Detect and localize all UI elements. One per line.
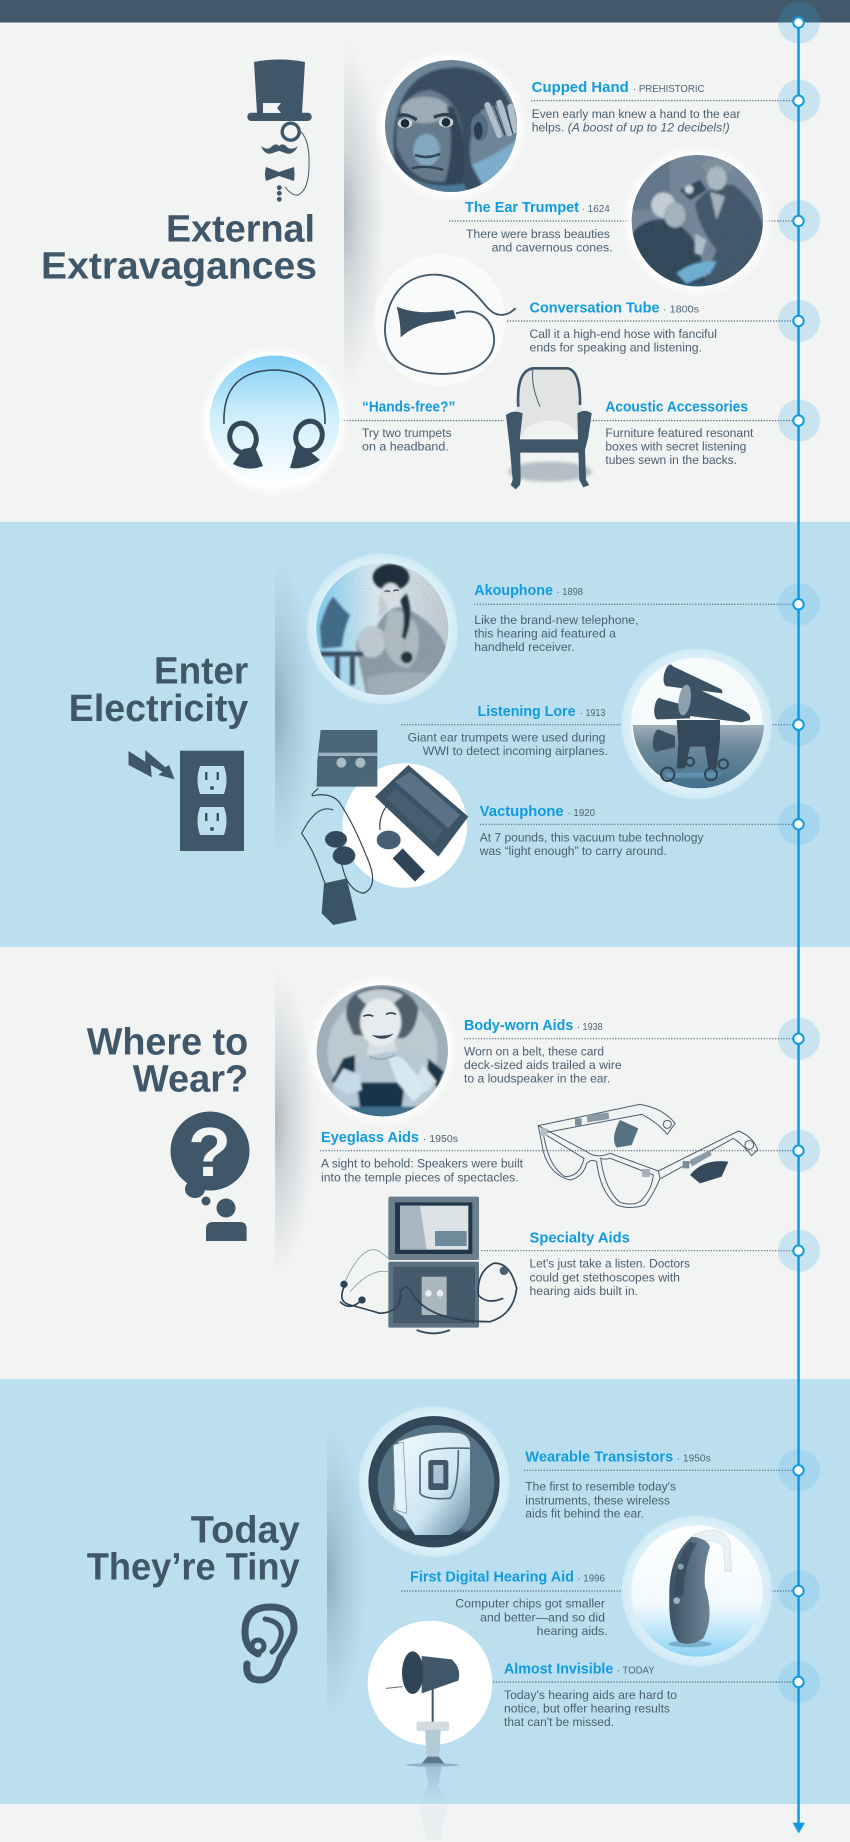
body text: handheld receiver. xyxy=(474,640,574,654)
title: Today They're Tiny: Today xyxy=(191,1509,300,1551)
body text xyxy=(605,426,754,467)
heading and date: · 1950s xyxy=(677,1454,711,1465)
body text xyxy=(455,1597,608,1638)
body text: Giant ear trumpets were used during xyxy=(408,730,606,744)
icon: wall outlet xyxy=(180,751,244,851)
item: Body-worn Aids xyxy=(306,975,793,1127)
item: Wearable Transistors xyxy=(358,1405,793,1558)
title: External Extravagances: External xyxy=(166,208,315,250)
photo: digital behind-the-ear hearing aid xyxy=(621,1515,773,1667)
photo: two trumpets on a headband xyxy=(198,345,350,497)
heading: “Hands-free?” xyxy=(362,400,455,416)
body text: Like the brand-new telephone, xyxy=(474,613,638,627)
heading and date: · 1920 xyxy=(568,808,595,819)
body text: Furniture featured resonant xyxy=(605,426,754,440)
body text: boxes with secret listening xyxy=(605,440,747,454)
body text: aids fit behind the ear. xyxy=(525,1507,644,1521)
body text: and cavernous cones. xyxy=(492,241,613,255)
photo: vactuphone kit with cases, earpieces and battery xyxy=(302,730,468,925)
body text: Even early man knew a hand to the ear xyxy=(532,107,740,121)
body text: A sight to behold: Speakers were built xyxy=(321,1157,524,1171)
photo: engraving of man speaking into ear trumpet xyxy=(622,152,772,290)
title: Enter Electricity: Enter xyxy=(154,650,248,692)
heading: Specialty Aids xyxy=(530,1230,630,1246)
body text xyxy=(362,426,452,454)
icon: ear xyxy=(245,1607,294,1680)
body text xyxy=(530,1257,690,1298)
bottom footer strip xyxy=(0,1804,850,1842)
heading and date: · 1913 xyxy=(580,708,606,719)
item: Almost Invisible xyxy=(368,1621,793,1840)
body text: to a loudspeaker in the ear. xyxy=(464,1072,610,1086)
photo: conversation tube xyxy=(374,254,516,386)
body text: deck-sized aids trailed a wire xyxy=(464,1058,622,1072)
title: Today They're Tiny xyxy=(87,1509,300,1588)
icon: thought bubble with question mark and person: ? xyxy=(188,1113,231,1191)
heading and date: Conversation Tube xyxy=(530,300,660,316)
photo: smiling woman holding body-worn aids xyxy=(314,982,452,1120)
body text: Computer chips got smaller xyxy=(455,1597,605,1611)
photo: wearable transistor aid xyxy=(358,1405,510,1558)
top bar xyxy=(0,0,850,22)
heading and date: · 1996 xyxy=(577,1574,605,1585)
body text: Try two trumpets xyxy=(362,426,452,440)
icon: gentleman with top hat, monocle, mustache and bow tie xyxy=(247,60,312,202)
body text: ends for speaking and listening. xyxy=(530,340,702,354)
body text: could get stethoscopes with xyxy=(530,1270,680,1284)
title: Enter Electricity: Electricity xyxy=(69,688,248,730)
body text: instruments, these wireless xyxy=(525,1493,670,1507)
body text xyxy=(474,613,638,654)
body text: Worn on a belt, these card xyxy=(464,1044,604,1058)
section background: Enter Electricity xyxy=(0,522,850,947)
body text xyxy=(466,227,613,255)
body text xyxy=(532,107,740,134)
body text: hearing aids. xyxy=(537,1624,608,1638)
item: First Digital Hearing Aid xyxy=(401,1515,793,1667)
body text: that can't be missed. xyxy=(504,1715,614,1729)
body text: tubes sewn in the backs. xyxy=(605,453,737,467)
illustration: eyeglasses with built-in hearing aids xyxy=(538,1104,758,1207)
heading and date: The Ear Trumpet xyxy=(465,200,579,216)
body text: on a headband. xyxy=(362,440,449,454)
body text xyxy=(530,327,717,354)
title: External Extravagances: Extravagances xyxy=(41,246,317,288)
heading and date: Vactuphone xyxy=(480,804,564,820)
item: Acoustic Accessories xyxy=(506,367,793,489)
photo: in-canal hearing aid on a stand with reflection xyxy=(368,1621,492,1840)
body text: Today's hearing aids are hard to xyxy=(504,1688,677,1702)
title: Enter Electricity xyxy=(69,650,248,730)
body text: The first to resemble today's xyxy=(525,1480,676,1494)
heading and date: Eyeglass Aids xyxy=(321,1130,419,1146)
photo: woman holding an akouphone receiver xyxy=(306,553,459,705)
section background: Where to Wear xyxy=(0,947,850,1379)
icon: thought bubble with question mark and person xyxy=(170,1112,250,1241)
item: Hands-free xyxy=(198,345,504,497)
item: Listening Lore xyxy=(401,648,793,800)
title: Where to Wear?: Where to xyxy=(87,1021,248,1063)
heading and date: · TODAY xyxy=(617,1665,655,1676)
item: Vactuphone xyxy=(302,730,793,925)
heading and date: Almost Invisible xyxy=(504,1661,613,1677)
item: Cupped Hand xyxy=(374,49,793,203)
body text: There were brass beauties xyxy=(466,227,610,241)
body text xyxy=(504,1688,677,1729)
body text: Let's just take a listen. Doctors xyxy=(530,1257,690,1271)
body text: was “light enough” to carry around. xyxy=(479,844,667,858)
body text xyxy=(525,1480,676,1521)
body text: this hearing aid featured a xyxy=(474,627,616,641)
body text: Call it a high-end hose with fanciful xyxy=(530,327,717,341)
section background: Today They're Tiny xyxy=(0,1379,850,1804)
heading and date: Akouphone xyxy=(474,583,553,599)
heading: Acoustic Accessories xyxy=(605,400,748,416)
item: Akouphone xyxy=(306,553,793,705)
title: Where to Wear?: Wear? xyxy=(133,1059,248,1101)
title: Today They're Tiny: They’re Tiny xyxy=(87,1546,300,1588)
heading and date: · 1624 xyxy=(582,204,610,215)
photo: armchair with hidden listening tubes xyxy=(506,367,592,489)
heading and date: Body-worn Aids xyxy=(464,1018,573,1034)
body text xyxy=(479,830,704,858)
title: External Extravagances xyxy=(41,208,317,288)
body text: At 7 pounds, this vacuum tube technology xyxy=(480,830,704,844)
item: Eyeglass Aids xyxy=(320,1104,793,1207)
icon: lightning bolt xyxy=(128,750,174,779)
timeline axis with arrow and nodes xyxy=(778,2,820,1834)
item: Conversation Tube xyxy=(374,254,793,386)
heading and date: · 1950s xyxy=(423,1134,458,1145)
heading and date: Listening Lore xyxy=(478,704,576,720)
body text xyxy=(408,730,608,758)
photo: man cupping hand to ear xyxy=(382,56,520,196)
item: The Ear Trumpet xyxy=(449,145,793,297)
heading and date: Cupped Hand xyxy=(532,80,629,96)
body text: and better—and so did xyxy=(480,1610,605,1624)
heading and date: Wearable Transistors xyxy=(525,1450,673,1466)
title: Where to Wear? xyxy=(87,1021,248,1101)
heading and date xyxy=(532,80,704,96)
body text xyxy=(464,1044,622,1086)
body text: hearing aids built in. xyxy=(530,1284,638,1298)
body text xyxy=(321,1157,524,1184)
heading and date: · 1898 xyxy=(557,587,583,598)
photo: stethoscope hearing aid in a case xyxy=(340,1197,517,1333)
body text: notice, but offer hearing results xyxy=(504,1702,670,1716)
heading and date: First Digital Hearing Aid xyxy=(410,1570,574,1586)
item: Specialty Aids xyxy=(340,1197,793,1333)
photo: giant ear trumpets on a cart xyxy=(620,648,773,800)
body text: into the temple pieces of spectacles. xyxy=(321,1170,519,1184)
section background: External Extravagances xyxy=(0,0,850,522)
heading and date: · 1938 xyxy=(577,1022,603,1033)
heading and date: · PREHISTORIC xyxy=(633,84,704,95)
heading and date: · 1800s xyxy=(663,304,699,316)
body text: WWI to detect incoming airplanes. xyxy=(423,744,608,758)
body text: helps. (A boost of up to 12 decibels!) xyxy=(532,120,730,134)
